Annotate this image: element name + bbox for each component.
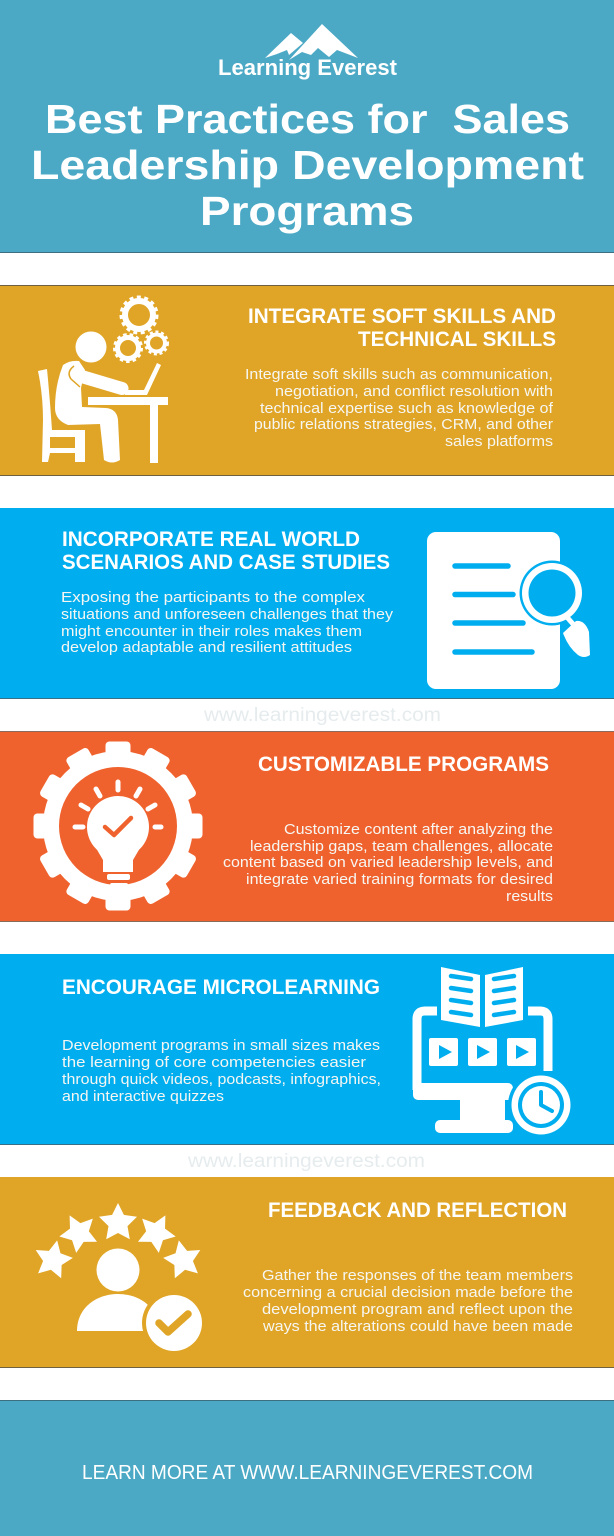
body text: might encounter in their roles makes them <box>61 623 362 640</box>
body text: public relations strategies, CRM, and other <box>254 416 553 433</box>
body text: through quick videos, podcasts, infographics, <box>62 1071 381 1088</box>
icon: document with magnifier <box>427 532 590 689</box>
heading: INTEGRATE SOFT SKILLS AND <box>248 305 556 328</box>
heading: INCORPORATE REAL WORLD <box>62 528 360 551</box>
body text: integrate varied training formats for desired <box>246 871 553 888</box>
heading: ENCOURAGE MICROLEARNING <box>62 976 380 999</box>
footer link text: LEARN MORE AT WWW.LEARNINGEVEREST.COM <box>82 1462 533 1484</box>
footer panel <box>0 1400 614 1536</box>
heading <box>248 305 556 351</box>
icon: person at laptop with gears <box>38 297 168 463</box>
panel: feedback and reflection <box>0 1177 614 1368</box>
icon: person with five stars and check <box>31 1203 206 1355</box>
panel: encourage microlearning <box>0 954 614 1145</box>
body text: sales platforms <box>445 433 553 450</box>
body text: Customize content after analyzing the <box>284 821 553 838</box>
panel: integrate soft skills and technical skills <box>0 285 614 476</box>
body text: Exposing the participants to the complex <box>61 589 366 606</box>
logo: Learning Everest <box>218 24 398 80</box>
title: Leadership Development <box>31 142 584 188</box>
icon: monitor with book, videos and clock <box>413 967 574 1138</box>
body text: Development programs in small sizes makes <box>62 1037 380 1054</box>
body text: situations and unforeseen challenges that they <box>61 606 394 623</box>
body text: Integrate soft skills such as communication, <box>245 366 553 383</box>
body text: ways the alterations could have been made <box>262 1318 573 1335</box>
body text <box>243 1267 573 1335</box>
body text: results <box>506 888 553 905</box>
title <box>31 96 584 234</box>
panel: customizable programs <box>0 731 614 922</box>
title: Programs <box>200 188 414 234</box>
body text <box>62 1037 381 1105</box>
watermark: www.learningeverest.com <box>187 1151 425 1172</box>
title: Best Practices for Sales <box>45 96 570 142</box>
body text: concerning a crucial decision made before the <box>243 1284 573 1301</box>
heading: TECHNICAL SKILLS <box>358 328 556 351</box>
panel: real world scenarios and case studies <box>0 508 614 699</box>
watermark: www.learningeverest.com <box>203 705 441 726</box>
heading: FEEDBACK AND REFLECTION <box>268 1199 567 1222</box>
body text: negotiation, and conflict resolution with <box>275 383 553 400</box>
heading: CUSTOMIZABLE PROGRAMS <box>258 753 549 776</box>
body text: Gather the responses of the team members <box>262 1267 573 1284</box>
body text <box>61 589 394 656</box>
logo: Learning Everest: Learning Everest <box>218 55 398 80</box>
body text <box>223 821 553 905</box>
body text <box>245 366 554 450</box>
body text: the learning of core competencies easier <box>62 1054 366 1071</box>
body text: technical expertise such as knowledge of <box>260 400 554 417</box>
body text: development program and reflect upon the <box>262 1301 573 1318</box>
icon: gear with light bulb <box>34 742 202 910</box>
header panel <box>0 0 614 253</box>
body text: develop adaptable and resilient attitudes <box>61 639 352 656</box>
body text: and interactive quizzes <box>62 1088 224 1105</box>
heading: SCENARIOS AND CASE STUDIES <box>62 551 390 574</box>
heading <box>62 528 390 574</box>
body text: content based on varied leadership levels, and <box>223 854 553 871</box>
body text: leadership gaps, team challenges, allocate <box>250 838 553 855</box>
